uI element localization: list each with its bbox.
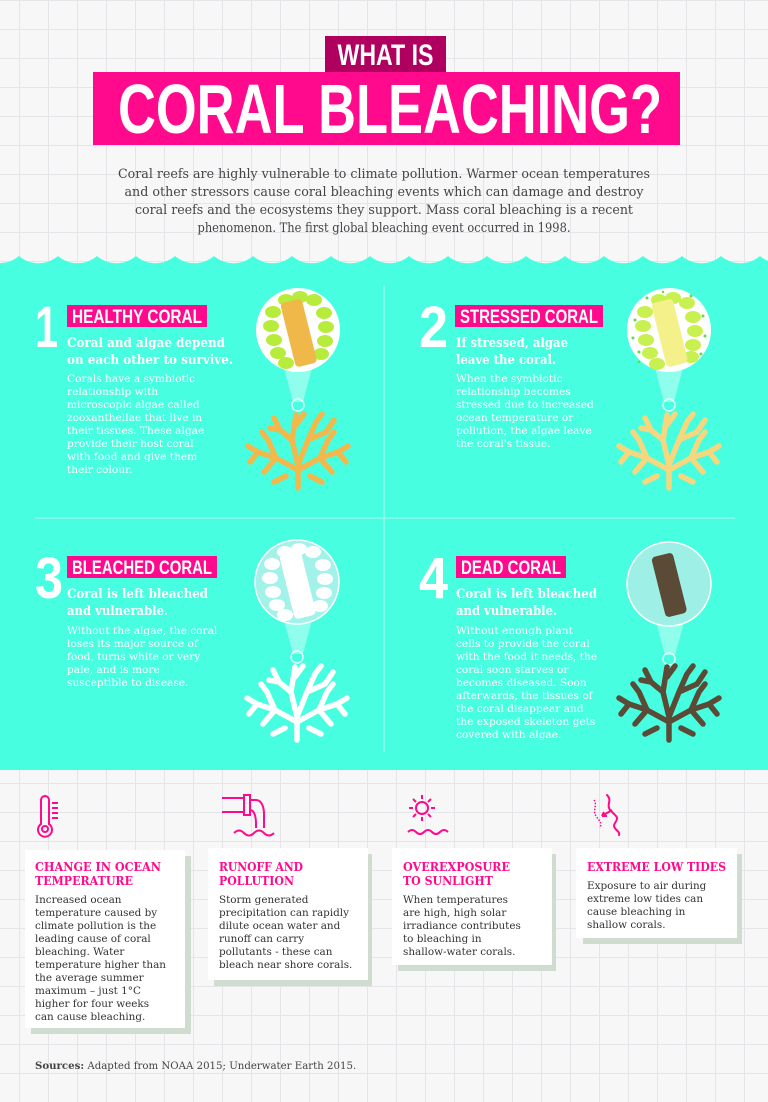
card: extreme low tides	[576, 848, 742, 944]
intro text: coral reefs and the ecosystems they support. Mass coral bleaching is a recent	[135, 203, 634, 218]
card: extreme low tides: extreme low tides can	[587, 893, 703, 905]
title: what is: WHAT IS	[338, 39, 434, 72]
subheading	[456, 336, 568, 368]
body text	[456, 373, 594, 450]
body text: pale, and is more	[67, 664, 160, 676]
card: change in ocean temperature	[25, 850, 191, 1034]
card: runoff and pollution: precipitation can rapidly	[219, 907, 349, 919]
body text: coral soon starves or	[456, 664, 569, 676]
subheading: If stressed, algae	[456, 336, 568, 351]
card: runoff and pollution: RUNOFF AND	[219, 860, 303, 874]
body text	[67, 625, 218, 689]
card: overexposure to sunlight	[392, 848, 556, 971]
card: runoff and pollution: pollutants - these can	[219, 946, 333, 958]
heading: stressed coral: STRESSED CORAL	[460, 307, 598, 328]
icon: low tides	[594, 795, 619, 835]
card: overexposure to sunlight: TO SUNLIGHT	[403, 874, 493, 888]
card: overexposure to sunlight: When temperatures	[403, 894, 508, 906]
card: overexposure to sunlight: are high, high solar	[403, 907, 506, 919]
card: overexposure to sunlight: to bleaching in	[403, 933, 482, 945]
card: overexposure to sunlight: OVEREXPOSURE	[403, 860, 510, 874]
illustration: dead coral	[619, 542, 719, 740]
body text: microscopic algae called	[67, 399, 200, 411]
panel: bleached coral: 3	[35, 546, 63, 611]
subheading: Coral and algae depend	[67, 336, 225, 351]
card: runoff and pollution: Storm generated	[219, 894, 309, 906]
card: change in ocean temperature: the average summer	[35, 972, 144, 984]
panel: healthy coral: 1	[35, 295, 58, 360]
body text: provide their host coral	[67, 438, 194, 450]
body text: cells to provide the coral	[456, 638, 590, 650]
body text: food, turns white or very	[67, 651, 200, 663]
heading: bleached coral: BLEACHED CORAL	[72, 558, 212, 579]
subheading	[67, 587, 208, 619]
illustration: bleached coral	[247, 540, 347, 740]
body text: their tissues. These algae	[67, 425, 204, 437]
illustration: healthy coral	[248, 288, 348, 488]
body text: Without enough plant	[456, 625, 574, 637]
sources: Sources: Adapted from NOAA 2015; Underwater Earth 2015.	[35, 1060, 356, 1072]
card: change in ocean temperature: can cause bleaching.	[35, 1011, 145, 1023]
body text: becomes diseased. Soon	[456, 677, 587, 689]
panel: bleached coral	[35, 540, 347, 740]
teal ocean band	[0, 256, 768, 770]
card: change in ocean temperature: leading cause of coral	[35, 933, 151, 945]
subheading	[67, 336, 233, 368]
card: change in ocean temperature: CHANGE IN OCEAN	[35, 860, 161, 874]
panel: dead coral: 4	[419, 546, 448, 611]
card: extreme low tides: cause bleaching in	[587, 906, 686, 918]
intro text: Coral reefs are highly vulnerable to climate pollution. Warmer ocean temperatures	[118, 167, 650, 182]
card: change in ocean temperature: temperature higher than	[35, 959, 166, 971]
card: runoff and pollution: POLLUTION	[219, 874, 294, 888]
card: change in ocean temperature: Increased ocean	[35, 894, 122, 906]
body text: zooxanthellae that live in	[67, 412, 202, 424]
subheading: and vulnerable.	[67, 604, 168, 619]
subheading: Coral is left bleached	[67, 587, 208, 602]
heading: healthy coral: HEALTHY CORAL	[72, 307, 202, 328]
card: runoff and pollution: runoff can carry	[219, 933, 304, 945]
subheading	[456, 587, 597, 619]
body text: their colour.	[67, 464, 132, 476]
subheading: Coral is left bleached	[456, 587, 597, 602]
subheading: leave the coral.	[456, 353, 556, 368]
body text	[456, 625, 597, 741]
card: runoff and pollution	[208, 848, 372, 986]
card: change in ocean temperature: climate pollution is the	[35, 920, 156, 932]
card: overexposure to sunlight: irradiance contributes	[403, 920, 521, 932]
card: runoff and pollution: bleach near shore corals.	[219, 959, 352, 971]
intro text	[118, 167, 650, 236]
body text	[67, 373, 204, 476]
body text: relationship with	[67, 386, 158, 398]
card: extreme low tides: shallow corals.	[587, 919, 666, 931]
body text: the coral disappear and	[456, 703, 584, 715]
body text: the exposed skeleton gets	[456, 716, 595, 728]
body text: When the symbiotic	[456, 373, 563, 385]
body text: with food and give them	[67, 451, 197, 463]
body text: ocean temperature or	[456, 412, 574, 424]
icon: sun over water	[408, 795, 448, 834]
body text: the coral's tissue.	[456, 438, 550, 450]
body text: relationship becomes	[456, 386, 571, 398]
icon: thermometer	[38, 796, 58, 837]
panel: stressed coral: 2	[419, 295, 448, 360]
illustration: stressed coral	[619, 288, 719, 488]
card: change in ocean temperature: bleaching. Water	[35, 946, 124, 958]
panel: dead coral	[419, 542, 719, 741]
body text: susceptible to disease.	[67, 677, 188, 689]
card: extreme low tides: Exposure to air during	[587, 880, 707, 892]
subheading: and vulnerable.	[456, 604, 557, 619]
heading: dead coral: DEAD CORAL	[461, 558, 561, 579]
icon: pipe runoff	[222, 795, 274, 836]
body text: pollution, the algae leave	[456, 425, 592, 437]
body text: afterwards, the tissues of	[456, 690, 594, 702]
body text: Corals have a symbiotic	[67, 373, 195, 385]
card: change in ocean temperature: TEMPERATURE	[35, 874, 133, 888]
panel: stressed coral	[419, 288, 719, 488]
body text: covered with algae.	[456, 729, 561, 741]
body text: stressed due to increased	[456, 399, 594, 411]
card: extreme low tides: EXTREME LOW TIDES	[587, 860, 726, 874]
subheading: on each other to survive.	[67, 353, 233, 368]
card: change in ocean temperature: temperature caused by	[35, 907, 157, 919]
body text: Without the algae, the coral	[67, 625, 218, 637]
body text: with the food it needs, the	[456, 651, 597, 663]
panel: healthy coral	[35, 288, 348, 488]
card: change in ocean temperature: maximum – just 1°C	[35, 985, 141, 997]
intro text: and other stressors cause coral bleaching events which can damage and destroy	[124, 185, 644, 200]
card: runoff and pollution: dilute ocean water and	[219, 920, 341, 932]
card: overexposure to sunlight: shallow-water corals.	[403, 946, 515, 958]
body text: loses its major source of	[67, 638, 199, 650]
card: change in ocean temperature: higher for four weeks	[35, 998, 149, 1010]
intro text: phenomenon. The first global bleaching event occurred in 1998.	[198, 221, 570, 236]
